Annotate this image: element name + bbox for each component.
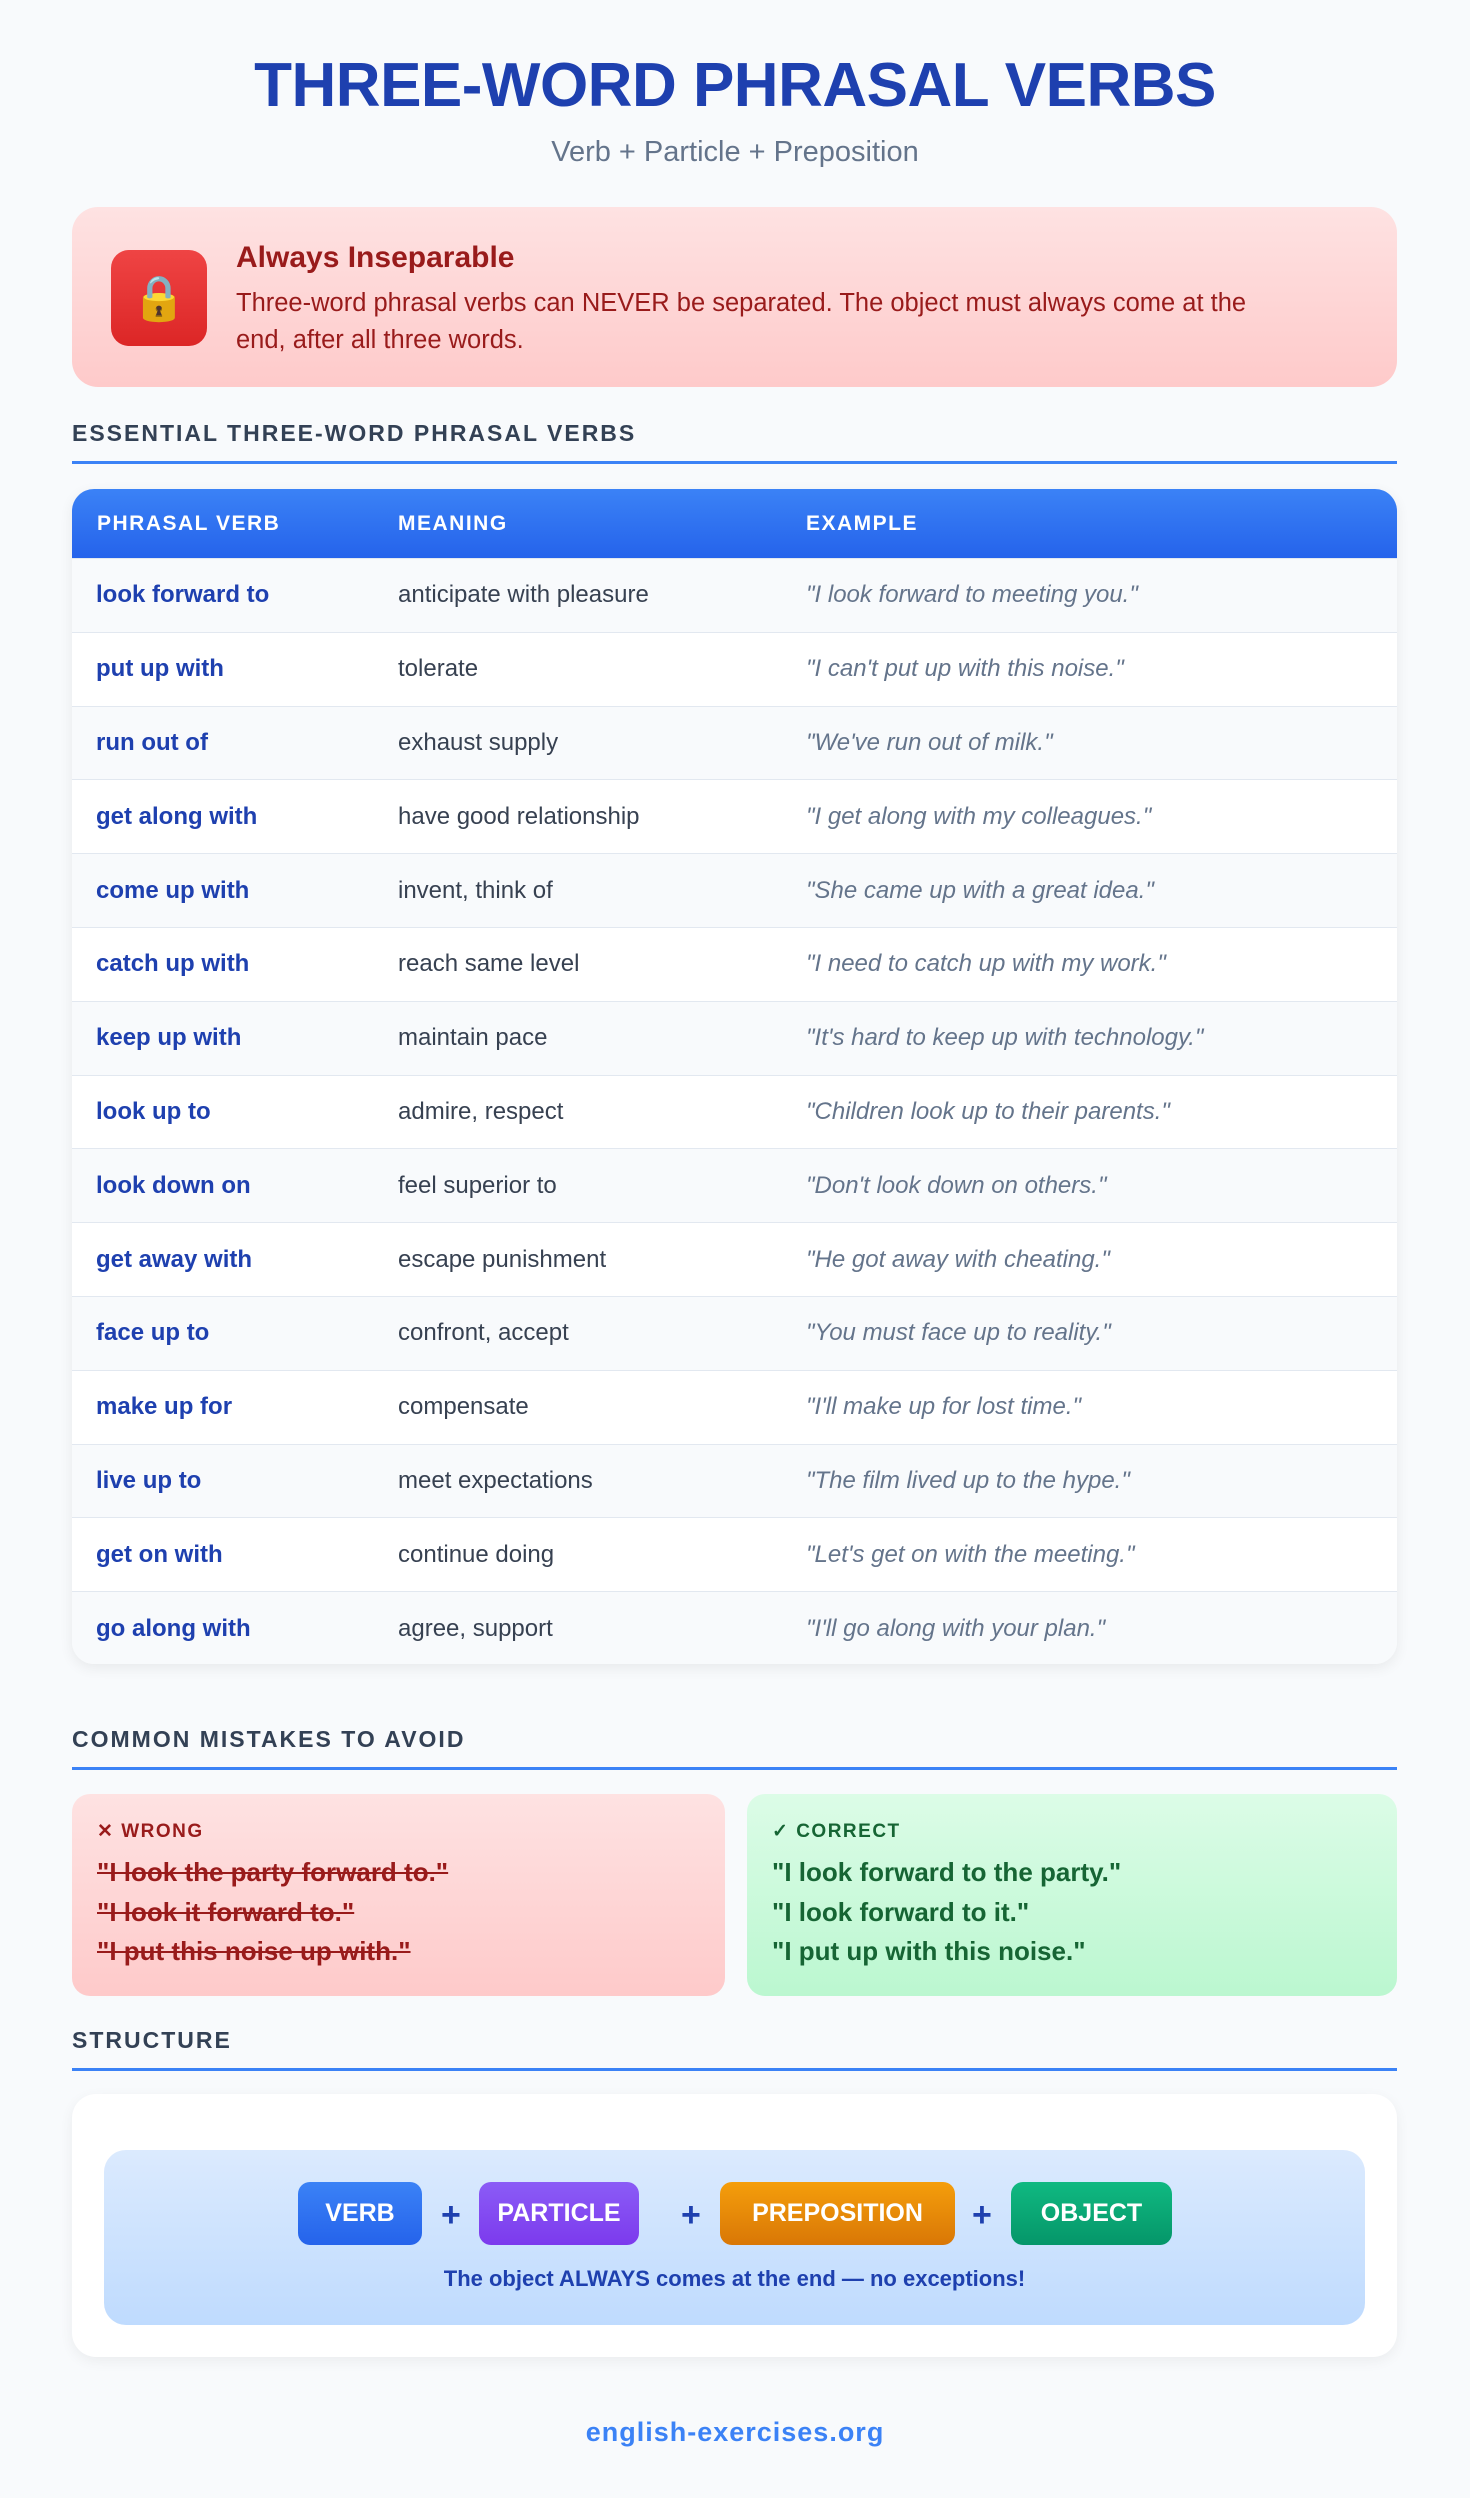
table rows: "Children look up to their parents." [806,1098,1170,1125]
table rows: face up to [96,1319,209,1346]
structure card [72,2094,1397,2357]
formula pills: VERB [325,2199,395,2227]
table rows: maintain pace [398,1024,547,1051]
table rows: meet expectations [398,1467,593,1494]
table rows: put up with [96,655,224,682]
table rows: tolerate [398,655,478,682]
table header: EXAMPLE [806,512,918,535]
table rows: feel superior to [398,1172,557,1199]
icon: lock [111,250,207,346]
title: THREE-WORD PHRASAL VERBS [254,51,1216,120]
table rows: come up with [96,877,249,904]
table rows: look up to [96,1098,211,1125]
table header: PHRASAL VERB [97,512,280,535]
callout heading: Always Inseparable [236,241,514,274]
table header [72,489,1397,558]
table: phrasal verbs [72,489,1397,1664]
table rows: "I look forward to meeting you." [806,581,1138,608]
table rows: exhaust supply [398,729,558,756]
table rows: "The film lived up to the hype." [806,1467,1130,1494]
table rows: "It's hard to keep up with technology." [806,1024,1203,1051]
table rows: catch up with [96,950,249,977]
icon: lock: 🔒 [132,274,186,323]
table rows: "Don't look down on others." [806,1172,1106,1199]
formula pills: + [972,2196,992,2234]
wrong examples: "I look it forward to." [97,1896,354,1926]
table rows: get away with [96,1246,252,1273]
callout text: Three-word phrasal verbs can NEVER be separated. The object must always come at the end, after all three words. [236,289,1246,354]
correct label: ✓ CORRECT [772,1821,901,1842]
correct examples [772,1857,1121,1966]
section heading: structure [72,2027,1397,2071]
table rows: look down on [96,1172,251,1199]
table rows: admire, respect [398,1098,563,1125]
formula pills: + [441,2196,461,2234]
table rows: "You must face up to reality." [806,1319,1111,1346]
panel: wrong [72,1794,725,1996]
formula pills: PARTICLE [497,2199,621,2227]
callout: always inseparable [72,207,1397,387]
wrong examples: "I look the party forward to." [97,1857,448,1887]
table rows: invent, think of [398,877,553,904]
table rows: "I can't put up with this noise." [806,655,1124,682]
table rows: "I get along with my colleagues." [806,803,1151,830]
structure formula box [104,2150,1365,2325]
table rows: reach same level [398,950,579,977]
table rows: get on with [96,1541,223,1568]
table rows: go along with [96,1615,251,1642]
table rows: continue doing [398,1541,554,1568]
table rows: "I'll go along with your plan." [806,1615,1105,1642]
correct examples: "I look forward to the party." [772,1857,1121,1887]
formula pills: PREPOSITION [752,2199,923,2227]
wrong label: ✕ WRONG [97,1821,204,1842]
formula pills: + [681,2196,701,2234]
table rows: escape punishment [398,1246,606,1273]
formula pills [298,2182,1172,2245]
correct examples: "I look forward to it." [772,1896,1029,1926]
structure caption: The object ALWAYS comes at the end — no exceptions! [444,2266,1025,2291]
table rows: compensate [398,1393,529,1420]
table header: MEANING [398,512,508,535]
wrong examples: "I put this noise up with." [97,1936,411,1966]
table rows: get along with [96,803,257,830]
formula pills: OBJECT [1041,2199,1142,2227]
section heading: structure: STRUCTURE [72,2027,232,2053]
panel: correct [747,1794,1397,1996]
table rows: "I need to catch up with my work." [806,950,1166,977]
table rows: "We've run out of milk." [806,729,1053,756]
table rows: "I'll make up for lost time." [806,1393,1081,1420]
table rows: "Let's get on with the meeting." [806,1541,1134,1568]
table rows: "He got away with cheating." [806,1246,1110,1273]
table rows: make up for [96,1393,232,1420]
table rows: look forward to [96,581,269,608]
table rows: "She came up with a great idea." [806,877,1154,904]
subtitle: Verb + Particle + Preposition [551,136,919,168]
table rows: have good relationship [398,803,640,830]
section heading: essential [72,420,1397,464]
correct examples: "I put up with this noise." [772,1936,1086,1966]
table rows: live up to [96,1467,201,1494]
table rows: confront, accept [398,1319,569,1346]
section heading: mistakes: COMMON MISTAKES TO AVOID [72,1726,465,1752]
table rows [72,558,1397,1642]
table rows: run out of [96,729,208,756]
footer: english-exercises.org [586,2417,884,2447]
table rows: agree, support [398,1615,553,1642]
section heading: mistakes [72,1726,1397,1770]
table rows: anticipate with pleasure [398,581,649,608]
section heading: essential: ESSENTIAL THREE-WORD PHRASAL VERBS [72,420,636,446]
table rows: keep up with [96,1024,241,1051]
wrong examples [97,1857,448,1966]
